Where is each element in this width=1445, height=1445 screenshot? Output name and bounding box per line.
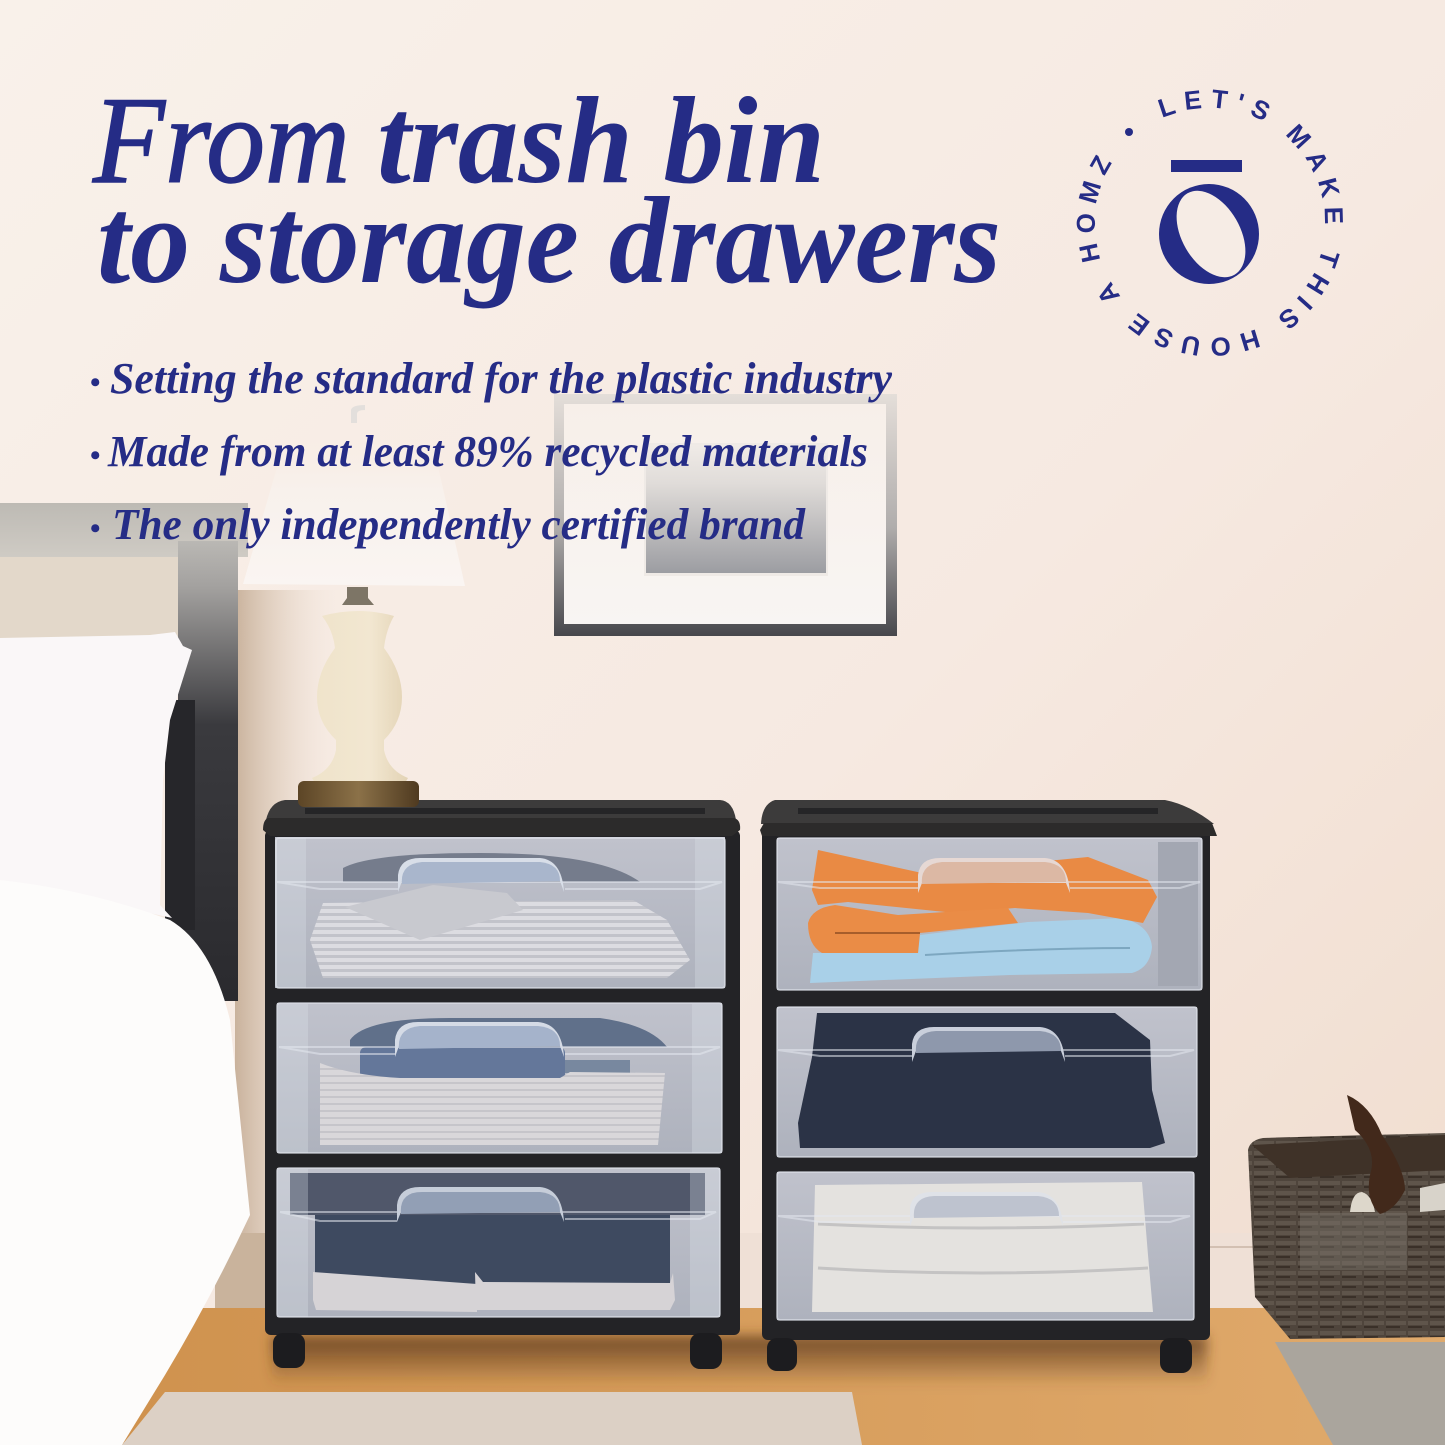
title: trash bin [377, 72, 825, 209]
right drawer 3: white towels [777, 1172, 1194, 1320]
pillow [0, 632, 192, 918]
framed picture [554, 394, 897, 636]
slogan dot [1125, 128, 1133, 136]
bullet list: • [90, 366, 101, 399]
right wheels [767, 1338, 1192, 1373]
circular slogan: LET'S MAKE THIS HOUSE A HOMZ [1076, 90, 1343, 356]
storage drawers unit: left [263, 800, 740, 1369]
logo circle [1159, 179, 1260, 289]
title: to storage drawers [97, 172, 1001, 309]
shadow on the wall beside the bed [235, 590, 345, 1300]
lamp brass base [298, 781, 419, 807]
bed headboard [0, 503, 248, 1001]
left drawer 2: rippled blanket [277, 1003, 722, 1153]
bullet list: The only independently certified brand [112, 500, 806, 549]
logo bar [1171, 160, 1242, 172]
left wheels [273, 1333, 722, 1369]
rug right [1275, 1342, 1445, 1445]
right drawer 1: orange and blue towels [777, 838, 1202, 990]
title: From [92, 72, 350, 209]
rug left [122, 1392, 862, 1445]
storage drawers unit: right [760, 800, 1217, 1373]
table lamp [243, 440, 465, 807]
left unit lid [263, 800, 740, 836]
bullet list: Setting the standard for the plastic industry [110, 354, 892, 403]
baseboard [215, 1233, 1260, 1308]
lamp shade [243, 440, 465, 586]
title [92, 72, 1001, 309]
wicker basket [1248, 1095, 1445, 1339]
bullet list: • [90, 512, 101, 545]
lamp vase [312, 611, 408, 783]
left drawer 3: navy and white rolls [277, 1168, 720, 1317]
left drawer 1: striped linen [275, 837, 725, 988]
right unit lid [760, 800, 1217, 836]
bed with white duvet [0, 880, 250, 1445]
wall hook [351, 405, 365, 423]
bullet list [90, 354, 892, 549]
lamp neck [342, 587, 374, 605]
floor [120, 1308, 1445, 1445]
round brand logo [1076, 90, 1343, 356]
bullet list: • [90, 439, 101, 472]
right drawer 2: navy clothes [777, 1007, 1197, 1157]
bullet list: Made from at least 89% recycled materials [107, 427, 868, 476]
